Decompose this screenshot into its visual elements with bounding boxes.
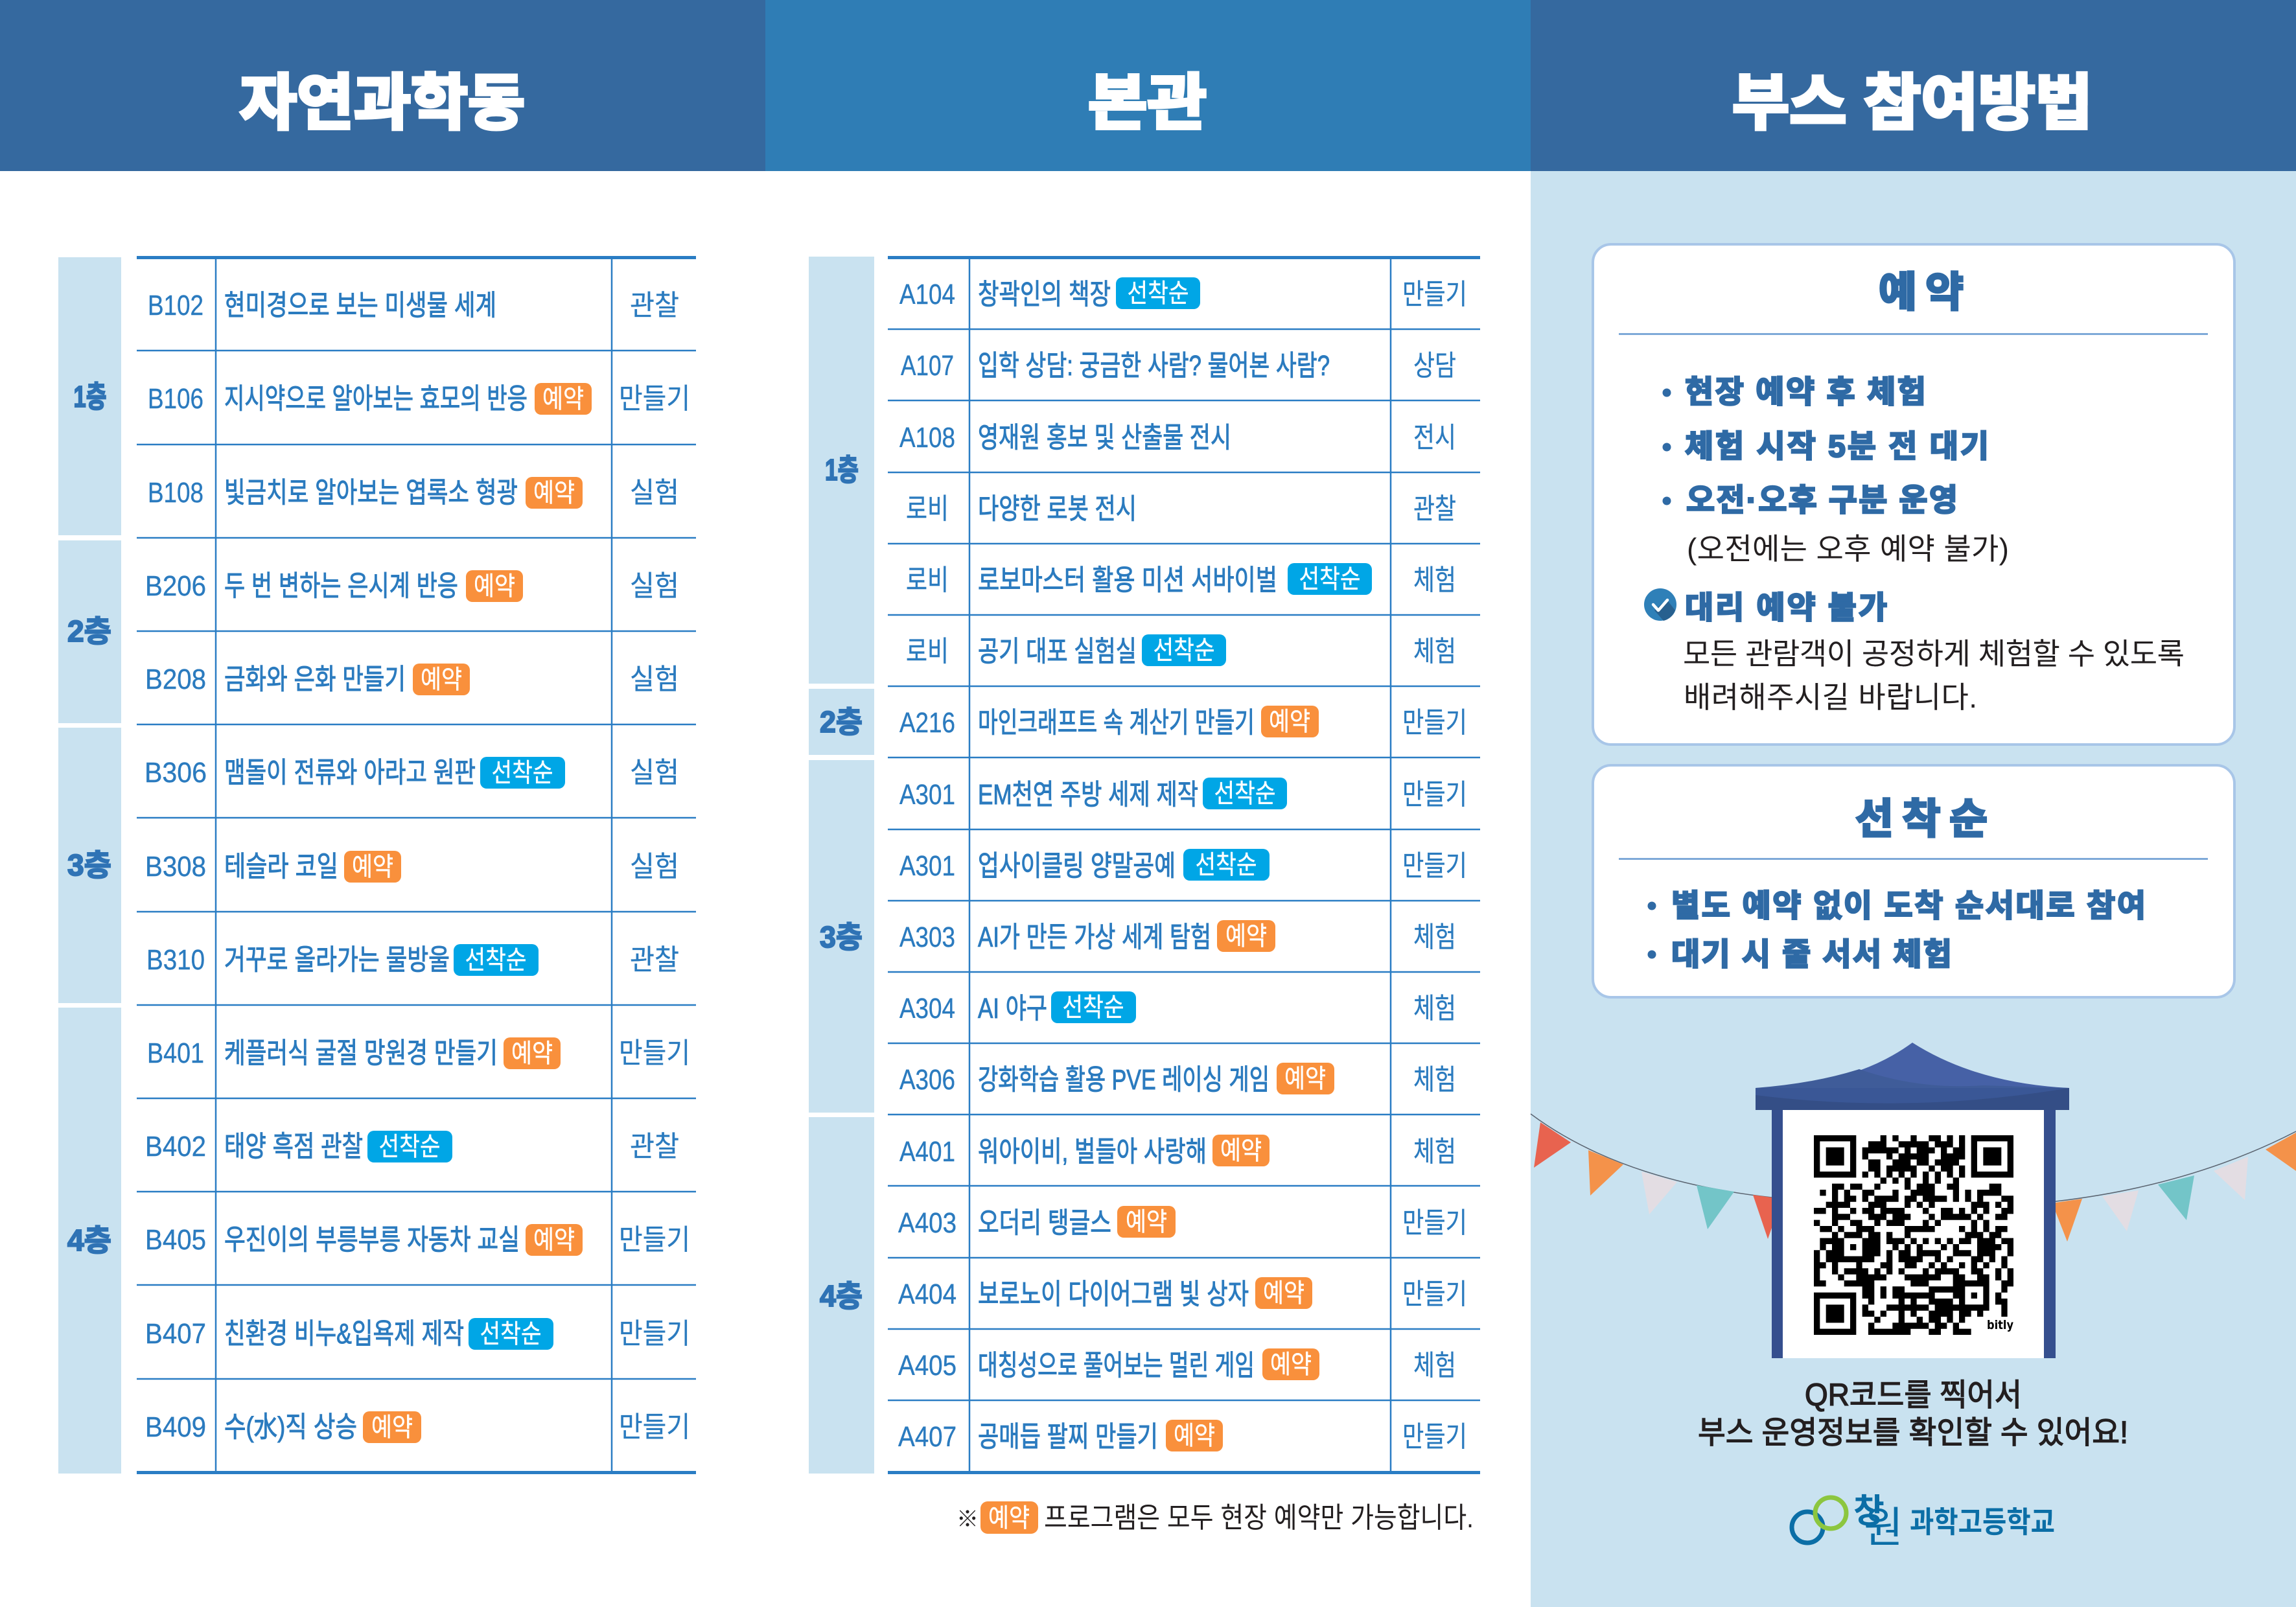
- logo: 창원과학고등학교: 원: [1864, 1503, 1903, 1551]
- row: B306: B306: [145, 757, 207, 789]
- row: 로비 공기 대포: [906, 634, 1456, 667]
- row: 로비 공기 대포: 선착순: [1154, 636, 1214, 665]
- row: B102: B102: [148, 290, 203, 321]
- row: A301 업사이클링: [899, 849, 1467, 882]
- row: A405: A405: [898, 1350, 957, 1382]
- row: A304: [899, 991, 1456, 1024]
- row: A403: 만들기: [1402, 1207, 1467, 1239]
- note: 대리 예약 불가: 대리 예약 불가: [1685, 591, 1887, 625]
- row: B409: B409: [145, 1411, 206, 1443]
- row: B208: [145, 664, 679, 695]
- floor block: 4층: 4층: [67, 1223, 111, 1257]
- row: A306: 예약: [1284, 1065, 1326, 1093]
- row: B308: 테슬라 코일: [224, 851, 338, 883]
- caption: QR 안내: 부스 운영정보를 확인할 수 있어요!: [1698, 1416, 2128, 1450]
- row: 로비 다양한 로봇 전시: 로비: [906, 493, 949, 525]
- bullet list: 예약 안내: 체험 시작 5분 전 대기: [1685, 430, 1989, 464]
- row: B401: 만들기: [619, 1037, 690, 1069]
- row: A301 업사이클링: 만들기: [1402, 850, 1467, 882]
- floor block: 4층: 4층: [820, 1279, 863, 1313]
- row: B409: 만들기: [619, 1411, 690, 1443]
- row: B407: 친환경 비누&입욕제 제작: [224, 1318, 464, 1350]
- row: A407: [898, 1420, 1467, 1453]
- row: B106: 만들기: [619, 383, 690, 415]
- row: B310: [146, 944, 679, 976]
- row: B401: 예약: [511, 1039, 553, 1068]
- floor block: 2층: [809, 689, 874, 755]
- row: 로비 공기 대포: 로비: [906, 636, 949, 667]
- row: A303: 예약: [1225, 922, 1267, 951]
- row: B108: 실험: [630, 477, 679, 509]
- row: A404: 보로노이 다이어그램 빛 상자: [978, 1278, 1249, 1310]
- bullet list: 예약 안내: 현장 예약 후 체험: [1685, 375, 1926, 410]
- row: B402: 관찰: [630, 1131, 679, 1162]
- row: B102: [148, 290, 679, 321]
- row: B402: 선착순: [378, 1133, 441, 1161]
- row: A403: A403: [898, 1207, 957, 1239]
- note: 대리 예약 불가: [1683, 591, 2185, 714]
- floor block: 2층: 2층: [67, 614, 111, 648]
- header: 자연과학동: 자연과학동: [240, 69, 525, 137]
- row: A304: 선착순: [1063, 993, 1124, 1022]
- row: B306: 실험: [630, 757, 679, 789]
- row: B108: [148, 477, 679, 509]
- row: B206: 두 번 변하는 은시계 반응: [224, 570, 458, 602]
- header: 자연과학동: [0, 0, 765, 171]
- floor block: 3층: 3층: [820, 920, 863, 954]
- row: A301 EM: EM천연 주방 세제 제작: [978, 779, 1198, 811]
- row: B409: 수(水)직 상승: [224, 1411, 357, 1443]
- row: A407: A407: [898, 1421, 957, 1453]
- row: B407: 선착순: [480, 1320, 542, 1348]
- footnote: ※: [957, 1507, 979, 1532]
- row: A108: 전시: [1413, 422, 1456, 454]
- bullet list: 예약 안내: 오전·오후 구분 운영: [1686, 483, 1958, 518]
- row: A301 EM: A301: [899, 779, 955, 811]
- row: A404: 예약: [1263, 1279, 1305, 1308]
- row: A304: A304: [899, 993, 955, 1024]
- row: B310: 거꾸로 올라가는 물방울: [224, 944, 450, 976]
- row: 로비 다양한 로봇 전시: 다양한 로봇 전시: [978, 493, 1137, 525]
- row: A301 EM: [899, 778, 1467, 811]
- row: B401: 케플러식 굴절 망원경 만들기: [224, 1037, 498, 1069]
- note: 대리 예약 불가: 배려해주시길 바랍니다.: [1684, 680, 1977, 714]
- row: A407: 만들기: [1402, 1421, 1467, 1453]
- row: A303: 체험: [1413, 921, 1456, 953]
- row: B102: 현미경으로 보는 미생물 세계: [224, 290, 496, 321]
- row: B108: 예약: [533, 479, 575, 507]
- row: 로비 로보마스터: 선착순: [1299, 565, 1361, 594]
- row: A304: AI 야구: [978, 993, 1047, 1024]
- row: B208: B208: [145, 664, 206, 695]
- icon: booth tent: [1756, 1043, 2069, 1358]
- header: 부스 참여방법: 부스 참여방법: [1732, 69, 2093, 137]
- row: A108: [899, 422, 1456, 454]
- row: A401: 예약: [1220, 1137, 1262, 1165]
- floor block: 3층: 3층: [67, 848, 111, 882]
- bullet list: 예약 안내: [1663, 375, 2009, 566]
- header: 본관: 본관: [1088, 69, 1207, 137]
- row: A306: 강화학습 활용 PVE 레이싱 게임: [978, 1064, 1270, 1096]
- row: B402: [145, 1131, 679, 1162]
- floor block: 1층: 1층: [825, 453, 859, 487]
- row: A303: A303: [899, 921, 955, 953]
- row: 로비 다양한 로봇 전시: [906, 493, 1456, 525]
- row: B206: [145, 570, 679, 602]
- logo: 창원과학고등학교: 과학고등학교: [1910, 1505, 2055, 1539]
- row: A104: 선착순: [1128, 279, 1189, 308]
- row: A404: [898, 1277, 1467, 1310]
- row: B308: 실험: [630, 851, 679, 883]
- row: B308: [145, 851, 679, 883]
- panel: 본관 table: [809, 256, 1480, 1474]
- row: B306: 선착순: [491, 759, 553, 787]
- row: A407: 예약: [1174, 1422, 1215, 1450]
- note: 대리 예약 불가: 모든 관람객이 공정하게 체험할 수 있도록: [1683, 637, 2185, 671]
- row: B308: B308: [145, 851, 206, 883]
- row: B206: B206: [145, 570, 206, 602]
- row: A304: 체험: [1413, 993, 1456, 1024]
- row: A104: 만들기: [1402, 279, 1467, 310]
- floor block: 1층: [58, 257, 121, 535]
- row: A104: A104: [899, 279, 955, 310]
- row: B310: 선착순: [465, 946, 526, 975]
- footnote: 예약: [988, 1504, 1030, 1532]
- row: B208: 금화와 은화 만들기: [224, 664, 406, 695]
- logo: 창원과학고등학교: [1792, 1493, 2055, 1551]
- row: B402: 태양 흑점 관찰: [224, 1131, 363, 1162]
- row: B405: 우진이의 부릉부릉 자동차 교실: [224, 1224, 520, 1256]
- row: B106: B106: [148, 383, 203, 415]
- floor block: 1층: [809, 257, 874, 684]
- row: A407: 공매듭 팔찌 만들기: [978, 1421, 1158, 1453]
- row: 로비 로보마스터: 체험: [1413, 564, 1456, 596]
- row: B405: [145, 1224, 690, 1256]
- floor block: 1층: 1층: [74, 380, 106, 413]
- floor block: 2층: [58, 540, 121, 723]
- caption: QR 안내: QR코드를 찍어서: [1805, 1378, 2022, 1413]
- row: 로비 로보마스터: 로비: [906, 564, 949, 596]
- row: A401: 체험: [1413, 1136, 1456, 1168]
- floor block: 2층: 2층: [820, 705, 863, 739]
- row: B409: 예약: [371, 1413, 413, 1442]
- row: A108: 영재원 홍보 및 산출물 전시: [978, 422, 1231, 454]
- row: B407: B407: [145, 1318, 206, 1350]
- row: A401: A401: [899, 1136, 955, 1168]
- row: A404: 만들기: [1402, 1278, 1467, 1310]
- row: A405: 예약: [1270, 1350, 1312, 1379]
- header: 부스 참여방법: [1531, 0, 2296, 171]
- row: B206: 예약: [474, 572, 515, 601]
- floor block: 4층: [809, 1117, 874, 1474]
- row: A403: 예약: [1126, 1208, 1167, 1236]
- row: A216: A216: [899, 707, 955, 739]
- row: A404: A404: [898, 1278, 957, 1310]
- row: A303: [899, 920, 1456, 953]
- QR code: [1814, 1139, 2014, 1332]
- row: B407: [145, 1318, 690, 1350]
- row: 로비 다양한 로봇 전시: 관찰: [1413, 493, 1456, 525]
- row: B208: 실험: [630, 664, 679, 695]
- bunting: right: [2056, 1131, 2296, 1242]
- row: 로비 로보마스터: 로보마스터 활용 미션 서바이벌: [978, 564, 1277, 596]
- panel: 자연과학동 table: [58, 256, 696, 1474]
- row: A216: 예약: [1269, 708, 1310, 736]
- row: A306: 체험: [1413, 1064, 1456, 1096]
- row: B108: B108: [148, 477, 203, 509]
- row: A401: 워아이비, 벌들아 사랑해: [978, 1136, 1207, 1168]
- card: 선착순: [1593, 765, 2234, 997]
- row: B402: B402: [145, 1131, 206, 1162]
- row: A405: 대칭성으로 풀어보는 멀린 게임: [978, 1350, 1255, 1382]
- row: B308: 예약: [352, 853, 393, 881]
- logo: 창원과학고등학교: 창: [1853, 1493, 1884, 1531]
- row: A104: [899, 277, 1467, 310]
- card title: 선착순: 선 착 순: [1855, 796, 1988, 842]
- row: A401: [899, 1135, 1456, 1168]
- row: A403: [898, 1206, 1467, 1239]
- row: A405: [898, 1348, 1456, 1382]
- footnote: 프로그램은 모두 현장 예약만 가능합니다.: [1044, 1502, 1474, 1534]
- row: B206: 실험: [630, 570, 679, 602]
- row: A405: 체험: [1413, 1350, 1456, 1382]
- icon: check circle: [1644, 588, 1676, 621]
- bullet list: 선착순 안내: [1647, 889, 2146, 972]
- header: 본관: [765, 0, 1531, 171]
- row: B405: 예약: [533, 1226, 575, 1254]
- row: B405: B405: [145, 1224, 206, 1256]
- row: A301 업사이클링: 선착순: [1195, 851, 1257, 879]
- floor block: 4층: [58, 1008, 121, 1474]
- row: A108: A108: [899, 422, 955, 454]
- row: A403: 오더리 탱글스: [978, 1207, 1111, 1239]
- row: A301 업사이클링: A301: [899, 850, 955, 882]
- row: B407: 만들기: [619, 1318, 690, 1350]
- row: B106: 지시약으로 알아보는 효모의 반응: [224, 383, 528, 415]
- row: B310: 관찰: [630, 944, 679, 976]
- bullet list: 예약 안내: (오전에는 오후 예약 불가): [1687, 532, 2009, 566]
- row: B306: 맴돌이 전류와 아라고 원판: [224, 757, 476, 789]
- row: B405: 만들기: [619, 1224, 690, 1256]
- row: 로비 로보마스터: [906, 563, 1456, 596]
- row: A306: [899, 1063, 1456, 1096]
- row: A303: AI가 만든 가상 세계 탐험: [978, 921, 1211, 953]
- floor block: 3층: [58, 728, 121, 1003]
- row: B409: [145, 1411, 690, 1443]
- row: A107: 상담: [1413, 350, 1456, 382]
- row: B401: B401: [147, 1037, 204, 1069]
- row: B208: 예약: [421, 665, 462, 694]
- row: A216: [899, 706, 1467, 739]
- row: A104: 창곽인의 책장: [978, 279, 1111, 310]
- row: B310: B310: [146, 944, 205, 976]
- row: B401: [147, 1037, 690, 1069]
- row: B108: 빛금치로 알아보는 엽록소 형광: [224, 477, 518, 509]
- caption: QR 안내: [1698, 1378, 2128, 1450]
- bullet list: 선착순 안내: 별도 예약 없이 도착 순서대로 참여: [1671, 889, 2146, 923]
- card title: 예약: 예 약: [1879, 269, 1964, 316]
- row: B306: [145, 757, 679, 789]
- row: 로비 공기 대포: 공기 대포 실험실: [978, 636, 1137, 667]
- row: B106: 예약: [542, 385, 584, 413]
- qr wordmark: bitly: bitly: [1987, 1318, 2014, 1332]
- row: B102: 관찰: [630, 290, 679, 321]
- row: A216: 만들기: [1402, 707, 1467, 739]
- row: A107: A107: [901, 350, 954, 382]
- floor block: 3층: [809, 760, 874, 1113]
- card: 예약: [1593, 244, 2234, 745]
- row: A301 EM: 선착순: [1214, 780, 1275, 808]
- row: A107: 입학 상담: 궁금한 사람? 물어본 사람?: [978, 350, 1330, 382]
- bunting: left: [1531, 1114, 1772, 1239]
- row: A301 업사이클링: 업사이클링 양말공예: [978, 850, 1176, 882]
- row: A306: A306: [899, 1064, 955, 1096]
- panel: right background: [1531, 171, 2296, 1607]
- bullet list: 선착순 안내: 대기 시 줄 서서 체험: [1671, 938, 1952, 972]
- row: 로비 공기 대포: 체험: [1413, 636, 1456, 667]
- row: A216: 마인크래프트 속 계산기 만들기: [978, 707, 1255, 739]
- row: A301 EM: 만들기: [1402, 779, 1467, 811]
